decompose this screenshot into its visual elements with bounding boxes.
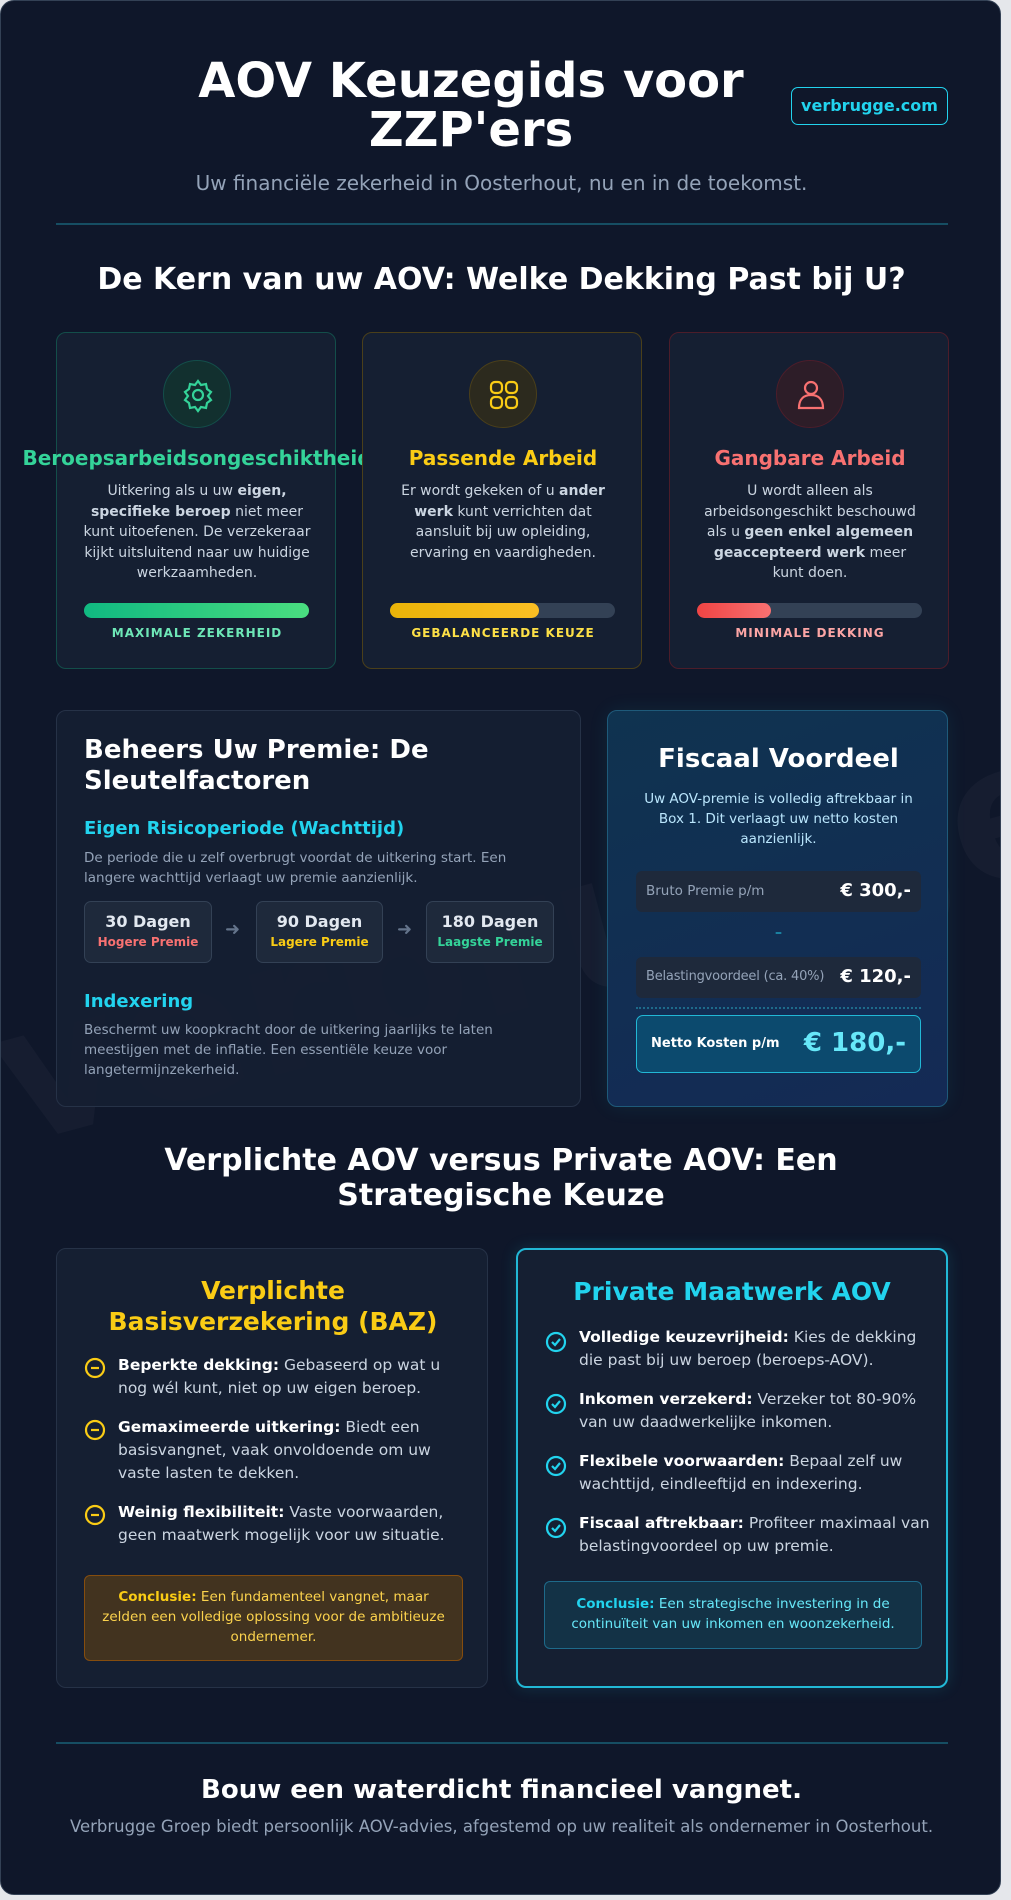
bar [390,603,615,618]
box: 30 dagen: Hogere Premie [98,935,198,949]
text: De periode die u zelf overbrugt voordat de uitkering start. Een langere wachttijd verlaagt uw premie aanzienlijk. [84,850,506,886]
footer heading: Bouw een waterdicht financieel vangnet. [201,1775,802,1805]
panel: fiscaal voordeel [607,710,948,1107]
box: 90 dagen [256,901,383,963]
subheading: wachttijd: Eigen Risicoperiode (Wachttijd) [84,818,404,839]
list: Fiscaal aftrekbaar: Profiteer maximaal van belastingvoordeel op uw premie. [579,1514,930,1555]
panel: beroeps [56,332,336,669]
text: Uw AOV-premie is volledig aftrekbaar in Box 1. Dit verlaagt uw netto kosten aanzienlijk. [644,791,913,847]
row: belasting [636,957,921,998]
arrow: ➜ [225,919,240,940]
title: Gangbare Arbeid [714,446,906,470]
icon: person [776,360,844,428]
list: Beperkte dekking: Gebaseerd op wat u nog wél kunt, niet op uw eigen beroep. [118,1356,440,1397]
list: Inkomen verzekerd: Verzeker tot 80-90% van uw daadwerkelijke inkomen. [579,1390,916,1431]
box: 30 dagen: 30 Dagen [105,912,191,931]
heading: kern: De Kern van uw AOV: Welke Dekking Past bij U? [97,262,906,297]
box: 30 dagen [84,901,212,963]
panel: premie [56,710,581,1107]
panel: gangbare [669,332,949,669]
label: MAXIMALE ZEKERHEID [112,626,282,640]
bar [84,603,309,618]
conclusion: Conclusie: Een fundamenteel vangnet, maar zelden een volledige oplossing voor de ambitieuze ondernemer. [102,1589,445,1645]
list: Volledige keuzevrijheid: Kies de dekking die past bij uw beroep (beroeps-AOV). [579,1328,916,1369]
row: netto: Netto Kosten p/m [651,1036,780,1051]
footer text: Verbrugge Groep biedt persoonlijk AOV-advies, afgestemd op uw realiteit als ondernemer in Oosterhout. [70,1817,933,1836]
box: 180 dagen [426,901,554,963]
box: 90 dagen: Lagere Premie [270,935,369,949]
list [84,1356,445,1544]
conclusion [84,1575,463,1661]
box: 90 dagen: 90 Dagen [277,912,362,931]
label: MINIMALE DEKKING [735,626,885,640]
title: Basisverzekering (BAZ) [109,1307,437,1336]
minus: – [775,925,782,941]
title [109,1276,437,1336]
bar [697,603,922,618]
heading: Beheers Uw Premie: De Sleutelfactoren [84,735,429,796]
title: AOV Keuzegids voor ZZP'ers [198,53,744,158]
text: Uitkering als u uw eigen, specifieke beroep niet meer kunt uitoefenen. De verzekeraar kijkt uitsluitend naar uw huidige werkzaamheden. [84,483,310,581]
heading: verplicht vs private: Verplichte AOV versus Private AOV: Een Strategische Keuze [164,1143,838,1213]
panel: BAZ [56,1248,488,1688]
row: bruto: € 300,- [840,880,911,901]
row: netto: € 180,- [804,1028,906,1058]
badge: verbrugge.com [791,87,948,125]
icon: grid [469,360,537,428]
list: Weinig flexibiliteit: Vaste voorwaarden, geen maatwerk mogelijk voor uw situatie. [118,1503,445,1544]
subheading: indexering: Indexering [84,991,193,1012]
subtitle: Uw financiële zekerheid in Oosterhout, nu en in de toekomst. [196,171,807,195]
title: Verplichte [201,1276,345,1305]
list [546,1328,930,1555]
row: bruto [636,871,921,912]
row: belasting: Belastingvoordeel (ca. 40%) [646,969,824,984]
title: Private Maatwerk AOV [573,1277,891,1306]
list: Flexibele voorwaarden: Bepaal zelf uw wachttijd, eindleeftijd en indexering. [579,1452,902,1493]
arrow: ➜ [397,919,412,940]
text: Er wordt gekeken of u ander werk kunt verrichten dat aansluit bij uw opleiding, ervaring en vaardigheden. [401,483,605,560]
row: belasting: € 120,- [840,966,911,987]
badge: verbrugge.com: verbrugge.com [801,96,938,115]
panel: private [516,1248,948,1688]
text: Beschermt uw koopkracht door de uitkering jaarlijks te laten meestijgen met de inflatie. Een essentiële keuze voor langetermijnzekerheid. [84,1022,493,1078]
box: 180 dagen: Laagste Premie [437,935,543,949]
list: Gemaximeerde uitkering: Biedt een basisvangnet, vaak onvoldoende om uw vaste lasten te dekken. [118,1418,431,1482]
text: U wordt alleen als arbeidsongeschikt beschouwd als u geen enkel algemeen geaccepteerd werk meer kunt doen. [704,483,916,581]
box: 180 dagen: 180 Dagen [442,912,538,931]
row: bruto: Bruto Premie p/m [646,883,764,899]
title: Passende Arbeid [409,446,597,470]
icon: gear [163,360,231,428]
heading: Fiscaal Voordeel [658,744,899,774]
title: Beroepsarbeidsongeschiktheid [22,446,372,470]
conclusion [544,1581,922,1649]
label: GEBALANCEERDE KEUZE [411,626,595,640]
conclusion: Conclusie: Een strategische investering in de continuïteit van uw inkomen en woonzekerheid. [571,1596,895,1632]
row: netto [636,1015,921,1073]
panel: passende [362,332,642,669]
